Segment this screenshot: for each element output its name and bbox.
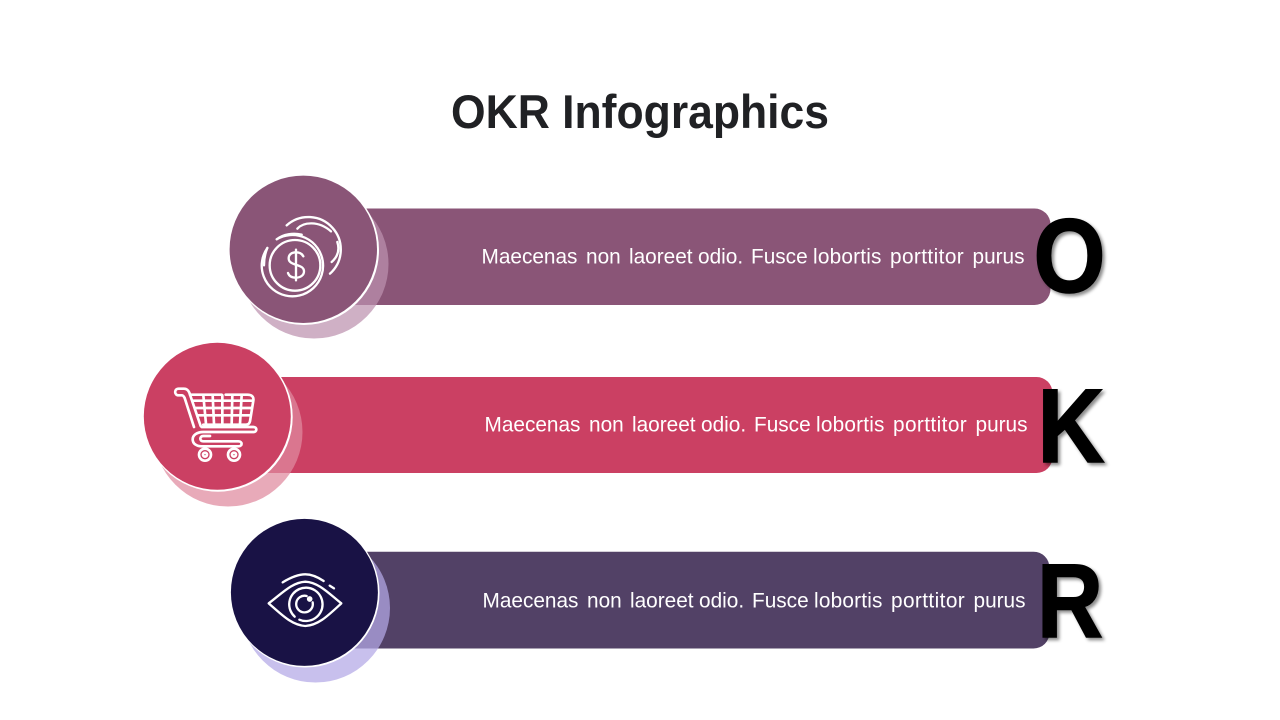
circle outline: key results bbox=[143, 342, 293, 492]
circle shadow: objectives bbox=[240, 190, 388, 338]
body text: key results: porttitor bbox=[893, 414, 967, 436]
body text: key results: laoreet bbox=[632, 414, 696, 436]
body text: results: purus bbox=[974, 590, 1026, 612]
body text: results: lobortis bbox=[814, 590, 883, 612]
panel: key results row bbox=[143, 342, 1105, 506]
panel: results row bbox=[230, 518, 1103, 682]
body text: objectives: laoreet bbox=[629, 246, 693, 268]
body text: key results: Fusce bbox=[754, 414, 811, 436]
body text: objectives: non bbox=[586, 246, 621, 268]
circle shadow: key results bbox=[154, 358, 302, 506]
body text: results: Fusce bbox=[752, 590, 809, 612]
circle outline: results bbox=[230, 518, 380, 668]
circle: key results bbox=[144, 343, 291, 490]
circle outline: objectives bbox=[229, 175, 379, 325]
title: OKR Infographics bbox=[451, 85, 829, 138]
body text: key results: purus bbox=[976, 414, 1028, 436]
body text: results: Maecenas bbox=[482, 590, 578, 612]
circle: objectives bbox=[230, 176, 377, 323]
icon: shopping cart bbox=[175, 389, 256, 461]
bar: key results bbox=[225, 377, 1052, 473]
letter R: R bbox=[1037, 543, 1103, 660]
body text: objectives: Maecenas bbox=[482, 246, 577, 268]
body text: results: odio. bbox=[699, 590, 744, 612]
bar: results bbox=[310, 552, 1050, 648]
icon: eye bbox=[269, 574, 341, 626]
body text: results: laoreet bbox=[630, 590, 694, 612]
body text: key results: Maecenas bbox=[484, 414, 580, 436]
body text: objectives: lobortis bbox=[813, 246, 882, 268]
body text: key results: non bbox=[589, 414, 624, 436]
bar: objectives bbox=[310, 208, 1050, 305]
body text: key results: odio. bbox=[701, 414, 746, 436]
body text: objectives: Fusce bbox=[751, 246, 808, 268]
body text: results: porttitor bbox=[891, 590, 965, 612]
body text: objectives: porttitor bbox=[890, 246, 964, 268]
panel: objectives row bbox=[229, 175, 1106, 338]
body text: objectives: purus bbox=[972, 246, 1025, 268]
body text: results: non bbox=[587, 590, 622, 612]
circle shadow: results bbox=[241, 534, 390, 682]
body text: objectives: odio. bbox=[698, 246, 743, 268]
icon: dollar coins bbox=[262, 217, 341, 296]
letter K: K bbox=[1038, 368, 1104, 485]
circle: results bbox=[231, 519, 378, 666]
letter O: O bbox=[1034, 198, 1106, 315]
body text: key results: lobortis bbox=[816, 414, 885, 436]
